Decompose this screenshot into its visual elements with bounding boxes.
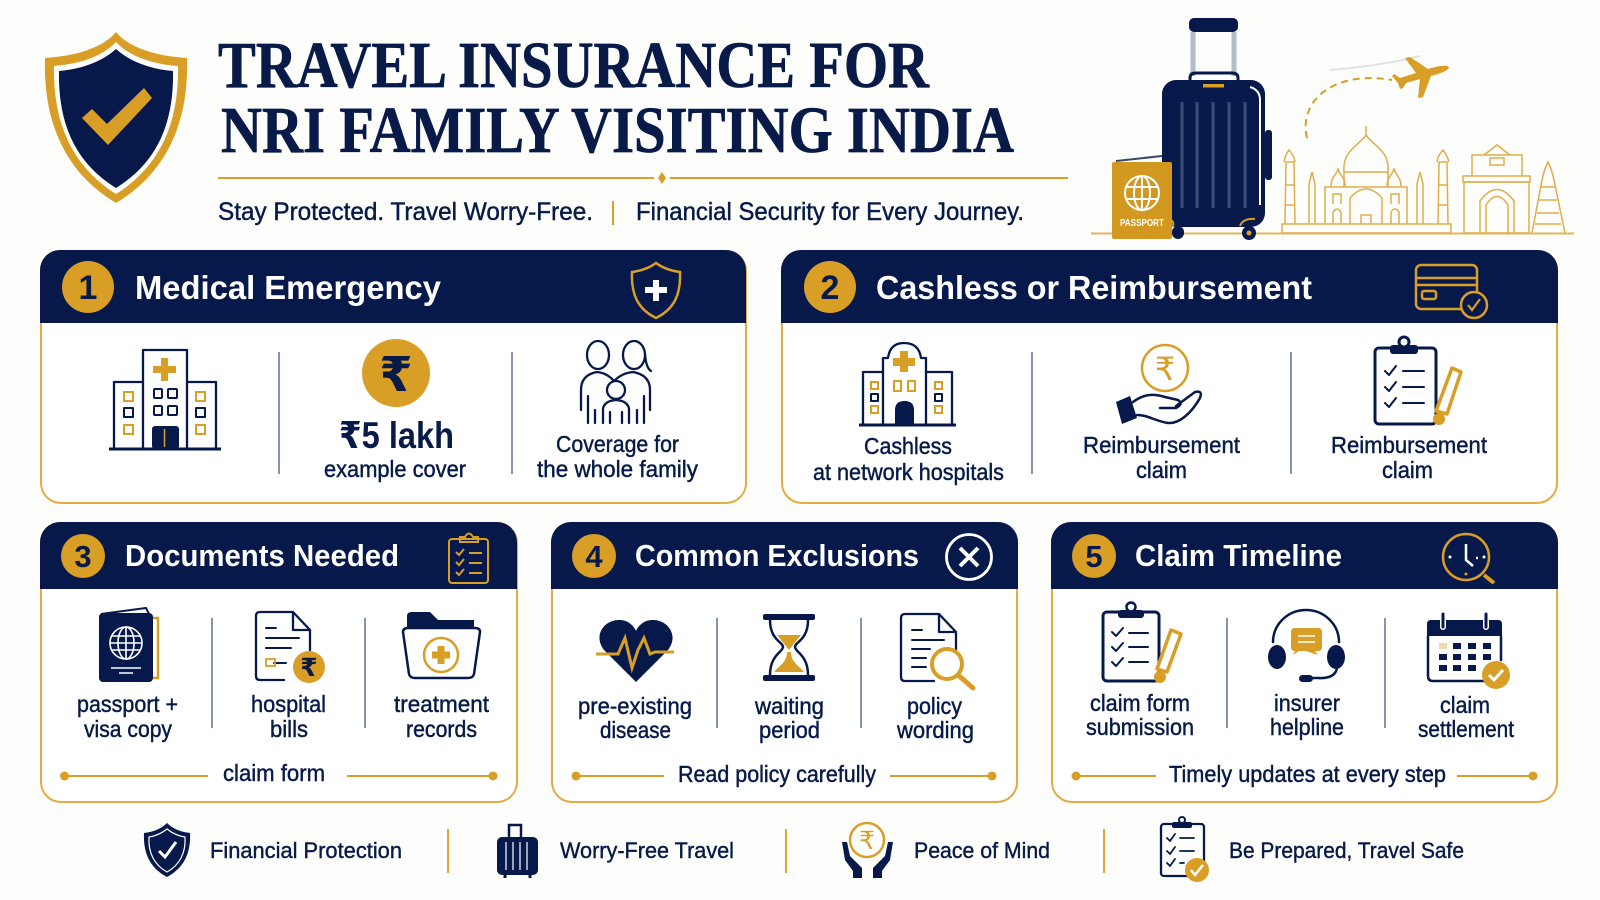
text: hospital bills: bills	[270, 716, 308, 742]
strip: worry-free travel	[497, 825, 734, 878]
number badge 1: 1	[79, 269, 97, 307]
strip divider	[447, 829, 449, 873]
text: treatment records: records	[406, 716, 477, 742]
panel: documents needed	[40, 522, 517, 802]
text: whole family coverage: Coverage for	[556, 431, 679, 457]
heading: documents needed: Documents Needed	[125, 538, 399, 573]
icon: medical records folder	[403, 612, 480, 678]
heading: claim timeline: Claim Timeline	[1135, 538, 1342, 573]
icon: suitcase	[1162, 18, 1272, 240]
icon: shield plus	[632, 263, 680, 318]
text: insurer helpline: helpline	[1270, 714, 1344, 740]
strip divider	[785, 829, 787, 873]
icon: hospital bill with rupee	[256, 612, 325, 683]
icon: main shield with check	[45, 32, 187, 203]
tagline	[218, 198, 1024, 226]
divider	[1226, 618, 1228, 728]
text: cashless at network hospitals	[813, 433, 1004, 485]
heading: medical emergency: Medical Emergency	[135, 269, 442, 306]
tagline: Financial Security for Every Journey.	[636, 198, 1024, 226]
icon: passport	[1112, 156, 1172, 239]
tagline: Stay Protected. Travel Worry-Free.	[218, 198, 593, 226]
text: cashless at network hospitals: Cashless	[864, 433, 952, 459]
icon: airplane with dashed route	[1306, 56, 1449, 138]
label: Financial Protection	[210, 838, 402, 863]
number badge 2: 2	[821, 269, 839, 307]
text: treatment records: treatment	[394, 691, 489, 717]
text: claim form submission: submission	[1086, 714, 1194, 740]
icon: India Gate outline	[1463, 145, 1530, 233]
panel: medical emergency	[40, 250, 746, 503]
icon: small suitcase	[497, 825, 538, 878]
text: claim settlement: claim	[1440, 692, 1490, 718]
text: reimbursement claim: Reimbursement	[1083, 432, 1240, 458]
icon: small clipboard	[1161, 817, 1209, 882]
text: reimbursement claim	[1083, 432, 1240, 483]
number badge 2	[804, 261, 856, 313]
text: waiting period	[754, 693, 824, 743]
icon: claim form clipboard	[1103, 602, 1181, 683]
icon: ground line	[1091, 232, 1574, 234]
text: policy wording	[896, 693, 974, 743]
text: policy wording: policy	[907, 693, 962, 719]
text: reimbursement claim	[1331, 432, 1487, 483]
icon: hand with rupee coin: ₹	[1155, 351, 1175, 387]
icon: crossed circle	[946, 534, 992, 580]
strip divider	[1103, 829, 1105, 873]
divider	[511, 352, 513, 474]
divider	[211, 618, 213, 728]
icon: hands holding rupee coin: ₹	[859, 827, 875, 855]
divider	[278, 352, 280, 474]
text: claim settlement: settlement	[1418, 716, 1514, 742]
icon: network hospital	[859, 343, 956, 425]
divider	[860, 618, 862, 728]
icon: rupee coin	[362, 339, 430, 407]
title divider	[218, 172, 1068, 184]
title	[218, 29, 1014, 167]
divider	[1384, 618, 1386, 728]
text: reimbursement claim: claim	[1136, 457, 1187, 483]
text: pre-existing disease: pre-existing	[578, 693, 692, 719]
heading: cashless or reimbursement: Cashless or Reimbursement	[876, 269, 1312, 306]
panel: common exclusions	[551, 522, 1018, 802]
panel: claim timeline	[1051, 522, 1558, 802]
text: passport and visa copy	[77, 691, 178, 742]
number badge 5	[1072, 534, 1116, 578]
icon: checklist clipboard	[449, 534, 488, 583]
icon: temple outline	[1532, 162, 1565, 233]
strip: be prepared	[1161, 817, 1464, 882]
text: claim form submission	[1086, 690, 1194, 740]
divider	[716, 618, 718, 728]
footer note: timely updates: Timely updates at every step	[1169, 761, 1446, 787]
number badge 5: 5	[1085, 539, 1103, 574]
divider	[1031, 352, 1033, 474]
strip: peace of mind	[842, 823, 1050, 878]
number badge 1	[62, 261, 114, 313]
icon: hands holding rupee coin	[842, 823, 893, 878]
footer note: read policy carefully: Read policy carefully	[678, 761, 876, 787]
text: cashless at network hospitals: at network hospitals	[813, 459, 1004, 485]
icon: hand with rupee coin	[1116, 345, 1201, 424]
text: five lakh cover: ₹5 lakh	[339, 415, 454, 456]
label: Worry-Free Travel	[560, 838, 734, 863]
text: policy wording: wording	[896, 717, 974, 743]
text: reimbursement claim: Reimbursement	[1331, 432, 1487, 458]
divider	[364, 618, 366, 728]
text: waiting period: waiting	[754, 693, 824, 719]
icon: small shield	[144, 823, 190, 877]
heading: common exclusions: Common Exclusions	[635, 538, 919, 573]
panel: cashless or reimbursement	[781, 250, 1558, 503]
text: passport and visa copy: passport +	[77, 691, 178, 717]
text: five lakh cover	[324, 415, 466, 482]
number badge 3: 3	[74, 539, 92, 574]
text: passport and visa copy: visa copy	[84, 716, 172, 742]
footer note: claim form	[60, 760, 498, 786]
title: NRI FAMILY VISITING INDIA	[221, 94, 1014, 167]
icon: credit card with check	[1416, 265, 1487, 318]
text: hospital bills	[251, 691, 326, 742]
icon: headset with speech bubble	[1268, 610, 1345, 682]
footer note: read policy carefully	[572, 761, 996, 787]
text: pre-existing disease	[578, 693, 692, 743]
number badge 4	[572, 534, 616, 578]
icon: family	[581, 341, 651, 423]
icon: passport: PASSPORT	[1120, 218, 1164, 229]
text: pre-existing disease: disease	[600, 717, 671, 743]
text: treatment records	[394, 691, 489, 742]
icon: clock	[1443, 534, 1494, 583]
footer note: timely updates	[1072, 761, 1538, 787]
divider	[1290, 352, 1292, 474]
text: hospital bills: hospital	[251, 691, 326, 717]
text: insurer helpline: insurer	[1274, 690, 1340, 716]
icon: passport booklet	[99, 608, 158, 682]
text: insurer helpline	[1270, 690, 1344, 740]
title: TRAVEL INSURANCE FOR	[218, 29, 930, 102]
text: claim form submission: claim form	[1090, 690, 1190, 716]
text: waiting period: period	[759, 717, 820, 743]
text: five lakh cover: example cover	[324, 456, 466, 482]
text: reimbursement claim: claim	[1382, 457, 1433, 483]
icon: hourglass	[763, 614, 815, 681]
icon: policy document with magnifier	[901, 614, 973, 688]
icon: heart with pulse	[596, 620, 674, 682]
footer note: claim form: claim form	[223, 760, 325, 786]
icon: rupee coin: ₹	[379, 349, 413, 402]
icon: hospital	[109, 350, 221, 449]
label: Peace of Mind	[914, 838, 1050, 863]
icon: calendar with check	[1427, 614, 1510, 689]
strip: financial protection	[144, 823, 402, 877]
label: Be Prepared, Travel Safe	[1229, 838, 1464, 863]
text: claim settlement	[1418, 692, 1514, 742]
number badge 3	[61, 534, 105, 578]
icon: clipboard with pencil	[1375, 337, 1461, 425]
text: whole family coverage	[537, 431, 698, 482]
icon: Taj Mahal outline	[1282, 126, 1451, 233]
icon: hospital bill with rupee: ₹	[300, 654, 318, 682]
number badge 4: 4	[585, 539, 603, 574]
text: whole family coverage: the whole family	[537, 456, 698, 482]
